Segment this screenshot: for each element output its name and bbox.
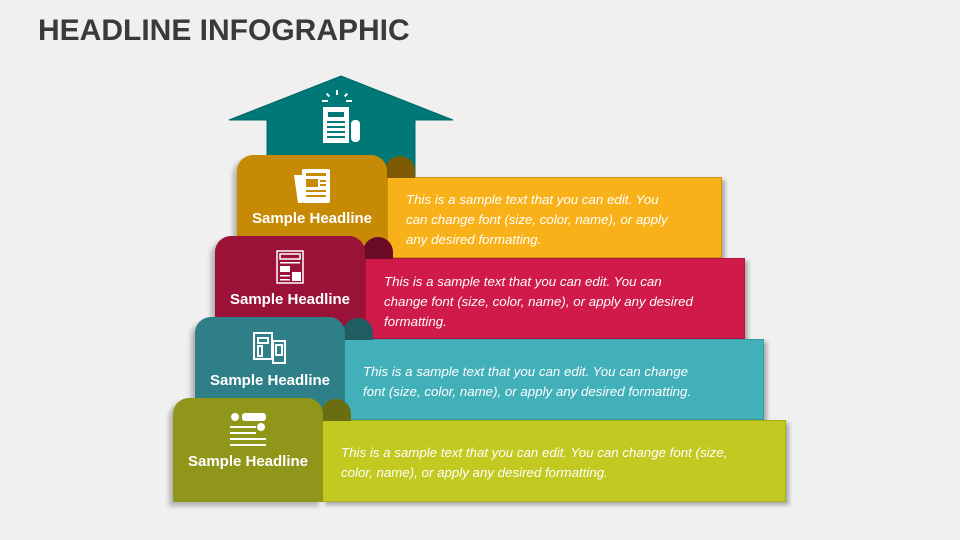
box 3: [344, 339, 764, 420]
tab 3: [195, 317, 345, 419]
step 2 crimson: [208, 236, 750, 339]
step 3 teal: [188, 317, 770, 420]
tab 3: Sample Headline: [210, 372, 330, 389]
curl 3: [343, 318, 373, 340]
box 2: [365, 258, 745, 339]
box 2: formatting.: [384, 314, 447, 329]
tab 4: Sample Headline: [188, 453, 308, 470]
box 1: can change font (size, color, name), or apply: [406, 212, 668, 227]
box 1: any desired formatting.: [406, 232, 541, 247]
box 4: This is a sample text that you can edit. You can change font (size,: [341, 445, 727, 460]
box 2: This is a sample text that you can edit. You can: [384, 274, 662, 289]
box 1: This is a sample text that you can edit. You: [406, 192, 659, 207]
box 1: [387, 177, 722, 258]
box 4: color, name), or apply any desired formatting.: [341, 465, 608, 480]
tab 2: Sample Headline: [230, 291, 350, 308]
tab 1: [237, 155, 387, 257]
step 4 olive: [166, 398, 792, 508]
tab 2: [215, 236, 365, 338]
tab 4: [173, 398, 323, 502]
box 2: change font (size, color, name), or apply any desired: [384, 294, 693, 309]
step 1 gold: [230, 155, 728, 258]
curl 4: [321, 399, 351, 421]
curl 1: [385, 156, 415, 178]
title: HEADLINE INFOGRAPHIC: [38, 14, 410, 47]
tab 1: Sample Headline: [252, 210, 372, 227]
box 4: [322, 420, 786, 502]
box 3: font (size, color, name), or apply any desired formatting.: [363, 384, 691, 399]
box 3: This is a sample text that you can edit. You can change: [363, 364, 688, 379]
curl 2: [363, 237, 393, 259]
